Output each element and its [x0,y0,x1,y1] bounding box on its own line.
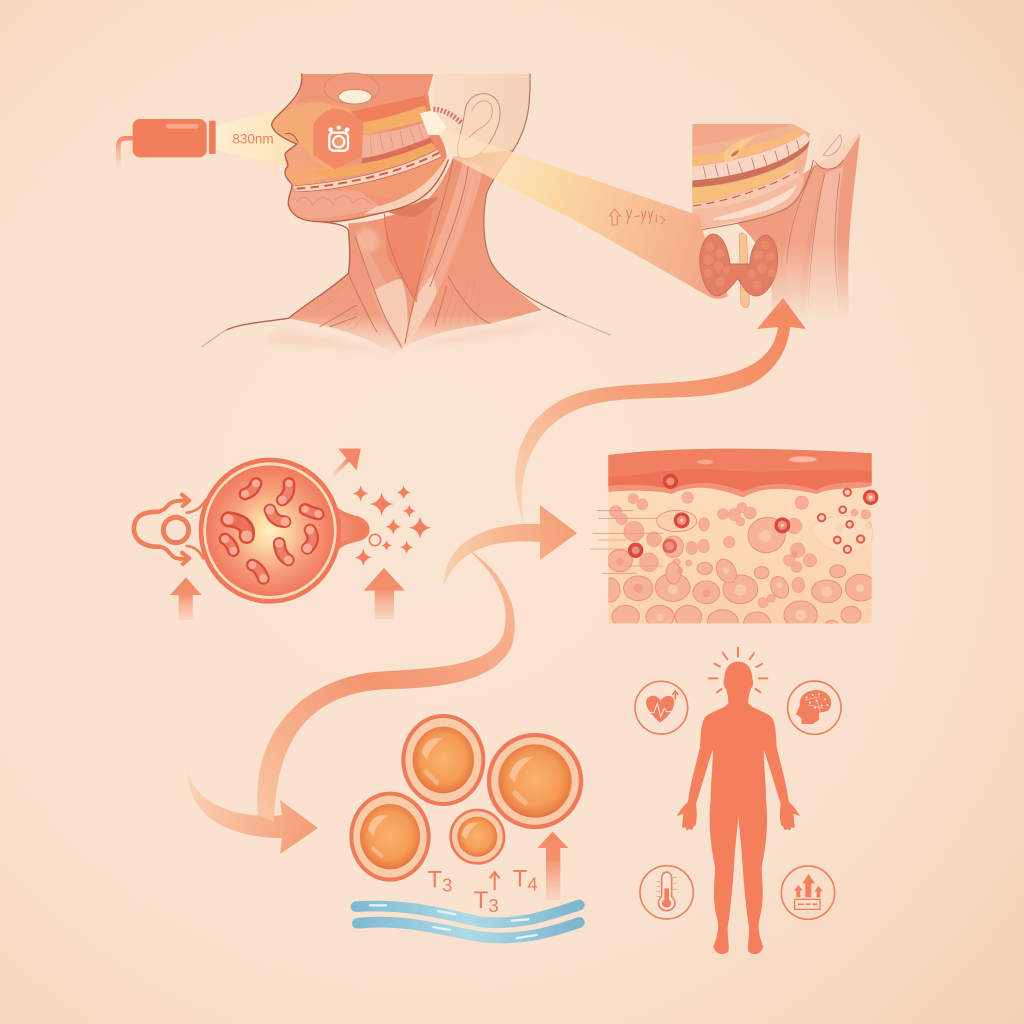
neck and shoulder muscles [267,150,550,355]
flow arrows [188,298,806,854]
cell: left [351,794,429,880]
inset jaw bands [692,124,813,232]
small fat cells [610,492,872,608]
outer membrane [201,460,339,601]
beam signal marks [609,209,665,225]
hormone labels: T [513,866,527,893]
hormone labels: T [427,866,442,893]
face outline [227,74,448,330]
lower jaw muscle [317,157,442,199]
arrow: up right [364,568,405,619]
cheek red band [333,95,428,123]
device [118,119,216,168]
orange band upper [357,105,428,135]
arrow: into skin tissue [444,505,577,586]
nose orange overlay [272,102,357,173]
jaw pale edge [363,157,447,214]
hormone labels: 4 [527,874,538,895]
wavelength label: 830nm [232,132,274,147]
trachea [739,233,749,308]
hormone labels: 3 [488,895,499,916]
adipocyte nuclei [616,551,798,598]
icon: receptor ring [328,126,349,151]
inset neck muscles [737,133,860,323]
back of head [433,74,530,193]
arrow: up to thyroid [515,298,806,524]
back of neck outline [484,74,567,317]
arrow: lower left into thyroid cells [188,772,318,854]
left ring connector [134,495,206,564]
large up arrow [537,832,568,900]
ear [457,94,500,159]
eye [338,89,372,104]
icon: thermometer [640,866,693,919]
arrow: small diagonal [333,451,358,475]
cell: small [451,810,504,863]
zoomed neck inset with thyroid [692,124,863,323]
nostril [285,133,298,143]
dark lip band [362,137,433,163]
hormone labels [427,866,538,916]
light beam through jaw [420,110,447,135]
blood vessel [356,905,579,938]
head rays [709,648,767,692]
forehead muscle [297,74,433,105]
eye socket [324,73,379,104]
energy sparkles [352,485,431,566]
small up arrow [490,872,500,890]
head and neck anatomy with 830nm device [118,73,610,355]
dotted gum band [293,149,442,192]
skin tissue cross-section [590,449,878,635]
large adipocytes [608,510,872,624]
second light beam to thyroid [436,126,728,299]
treatment coil near ear [433,109,462,123]
inset ear [815,127,863,169]
subcutaneous background [608,487,872,623]
inflamed red cells [628,474,878,558]
chin lobes [290,190,380,218]
skin epidermis layers [608,449,872,497]
arrow: curved S from thyroid cells to mitochondrion level [257,548,515,822]
up-arrow outline [609,209,621,225]
hex target badge [313,108,363,169]
upper teeth [362,121,430,158]
orange band lower [313,143,437,178]
light streak lines [590,511,663,573]
body silhouette with benefit icons [635,648,841,954]
hormone labels: 3 [442,874,452,895]
mitochondrion [134,451,431,620]
squiggle signal [627,210,665,224]
mitochondria beans [225,483,318,578]
icon: brain [788,681,841,734]
matrix [206,465,334,596]
thyroid follicle cells and hormones [351,716,581,938]
thyroid gland [700,225,778,308]
hormone labels: T [474,887,488,914]
cell: right [489,735,581,827]
device beam [216,107,300,170]
pale cell cluster [812,516,873,553]
icon: metabolism arrows [781,866,835,919]
cell: top [403,716,483,804]
membrane tail [330,500,370,558]
arrow: up left [170,577,202,620]
icon: heart [635,681,688,734]
human figure [677,662,800,954]
clipped tissue cells [608,492,872,624]
collarbone fade shapes [267,330,383,352]
face outer fill [272,74,447,222]
